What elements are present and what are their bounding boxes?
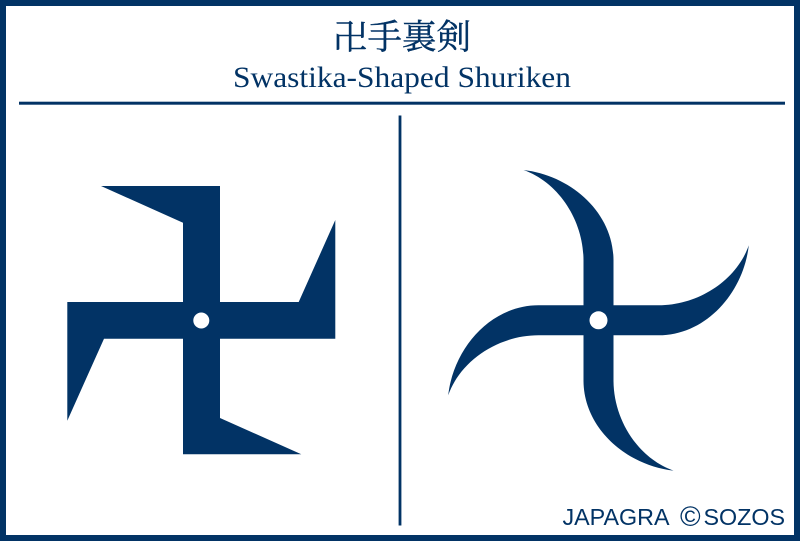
icon: curved-armed swastika shuriken [448,170,749,471]
credit text: JAPAGRA [562,504,670,530]
credit text: © [680,501,701,532]
title: English: Swastika-Shaped Shuriken [233,61,571,94]
icon: straight-armed swastika shuriken [67,186,335,454]
credit text: SOZOS [704,504,785,530]
title: Japanese: 卍手裏剣 [333,19,471,57]
